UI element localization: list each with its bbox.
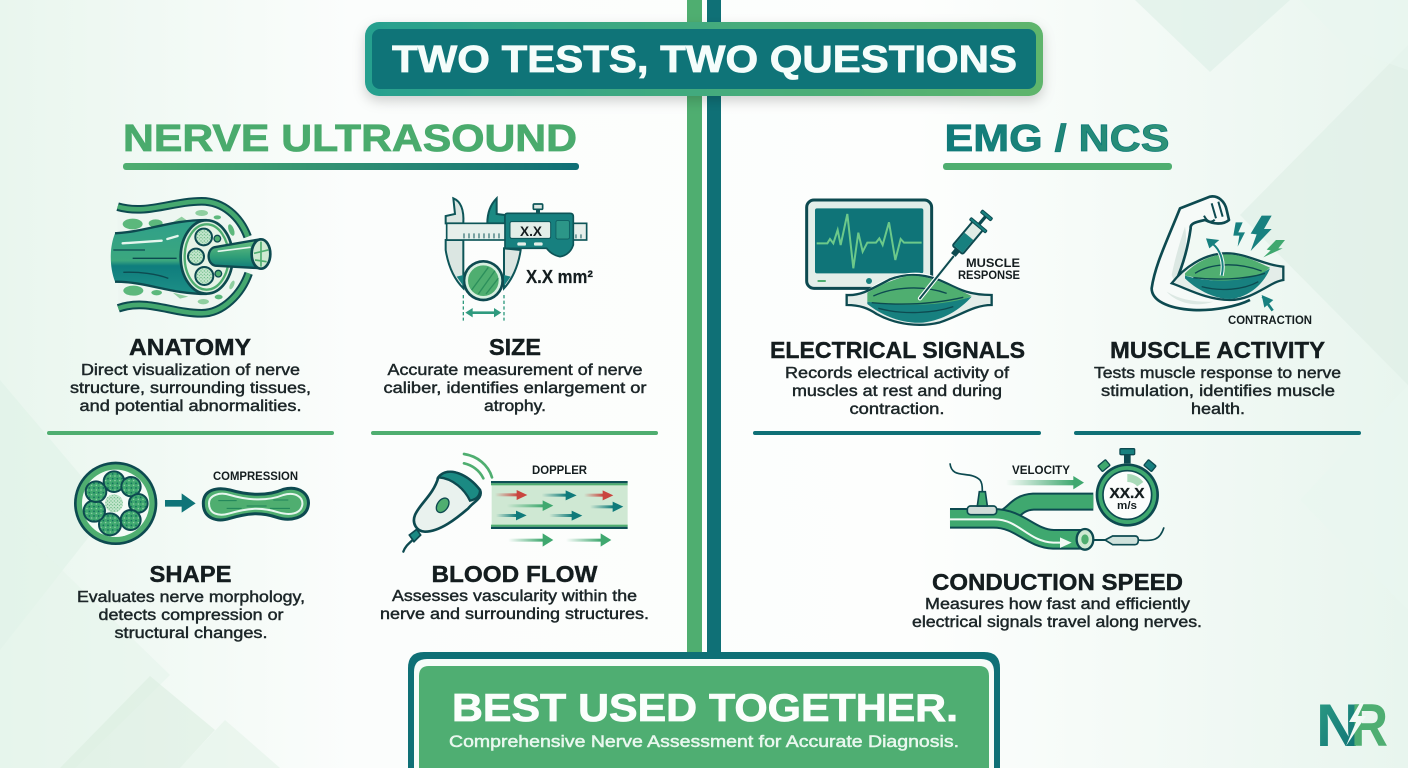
panel: blood flow text: BLOOD FLOW [432, 561, 598, 587]
panel: electrical signals text [770, 337, 1025, 418]
center divider [687, 0, 721, 655]
icon: nerve anatomy [111, 200, 270, 315]
stopwatch and velocity labels: XX.X [1110, 485, 1144, 502]
panel: size text: SIZE [489, 334, 541, 360]
callout: best used together: Comprehensive Nerve Assessment for Accurate Diagnosis. [449, 733, 959, 751]
panel: size text: Accurate measurement of nerve [388, 362, 642, 379]
panel: electrical signals text: Records electrical activity of [785, 365, 1010, 382]
icon: nerve conduction with stopwatch [950, 449, 1164, 550]
panel: electrical signals text: ELECTRICAL SIGNALS [770, 337, 1025, 363]
panel: blood flow text [380, 561, 649, 623]
callout: best used together: BEST USED TOGETHER. [452, 687, 958, 730]
panel: conduction speed text: CONDUCTION SPEED [932, 569, 1183, 595]
panel: conduction speed text: Measures how fast and efficiently [925, 596, 1190, 613]
panel: shape text: detects compression or [98, 607, 284, 624]
panel: shape text: Evaluates nerve morphology, [77, 589, 305, 606]
panel: anatomy text: Direct visualization of nerve [81, 362, 300, 379]
panel: anatomy text: and potential abnormalities. [80, 398, 302, 415]
icon: emg monitor, muscle and syringe [807, 200, 996, 325]
panel: anatomy text: structure, surrounding tissues, [70, 380, 311, 397]
panel: blood flow text: nerve and surrounding structures. [380, 606, 649, 623]
panel: blood flow text: Assesses vascularity within the [392, 588, 637, 605]
label: doppler: DOPPLER [532, 463, 587, 477]
panel: anatomy text: ANATOMY [129, 334, 251, 360]
panel: muscle activity text: stimulation, identifies muscle [1101, 383, 1335, 400]
stopwatch and velocity labels: m/s [1117, 500, 1137, 512]
title banner: TWO TESTS, TWO QUESTIONS [392, 39, 1017, 81]
logo: NR [1316, 692, 1388, 759]
title banner [365, 22, 1043, 96]
panel: shape text [77, 561, 305, 642]
panel: conduction speed text: electrical signals travel along nerves. [912, 614, 1202, 631]
logo: NR: R [1351, 692, 1388, 759]
panel: size text: caliber, identifies enlargement or [384, 380, 646, 397]
panel: conduction speed text [912, 569, 1202, 631]
logo: NR: N [1316, 692, 1360, 759]
panel: shape text: structural changes. [114, 625, 268, 642]
panel: shape text: SHAPE [150, 561, 232, 587]
stopwatch and velocity labels: VELOCITY [1012, 463, 1070, 477]
icon: flexed arm and muscle [1152, 196, 1285, 311]
heading: emg / ncs: EMG / NCS [944, 118, 1170, 160]
panel: muscle activity text: Tests muscle response to nerve [1094, 365, 1341, 382]
panel: muscle activity text: MUSCLE ACTIVITY [1110, 337, 1325, 363]
icon: ultrasound probe with doppler [403, 454, 628, 552]
caliper labels [520, 223, 593, 287]
panel: muscle activity text: health. [1191, 401, 1245, 418]
heading: nerve ultrasound: NERVE ULTRASOUND [123, 118, 577, 160]
panel: size text [384, 334, 646, 415]
panel: anatomy text [70, 334, 311, 415]
label: muscle response: MUSCLE [966, 258, 1020, 270]
label: compression: COMPRESSION [213, 469, 298, 483]
label: contraction: CONTRACTION [1228, 315, 1312, 327]
caliper labels: X.X [520, 223, 543, 239]
icon: nerve shape and compression [74, 462, 308, 545]
icon: caliper [446, 198, 587, 321]
panel: size text: atrophy. [484, 398, 546, 415]
label: muscle response: RESPONSE [958, 270, 1020, 282]
callout: best used together [408, 652, 1000, 768]
stopwatch and velocity labels [1012, 463, 1144, 512]
panel: muscle activity text [1094, 337, 1341, 418]
label: muscle response [958, 258, 1020, 282]
caliper labels: X.X mm² [526, 267, 593, 287]
panel: electrical signals text: muscles at rest and during [792, 383, 1002, 400]
panel: electrical signals text: contraction. [850, 401, 944, 418]
